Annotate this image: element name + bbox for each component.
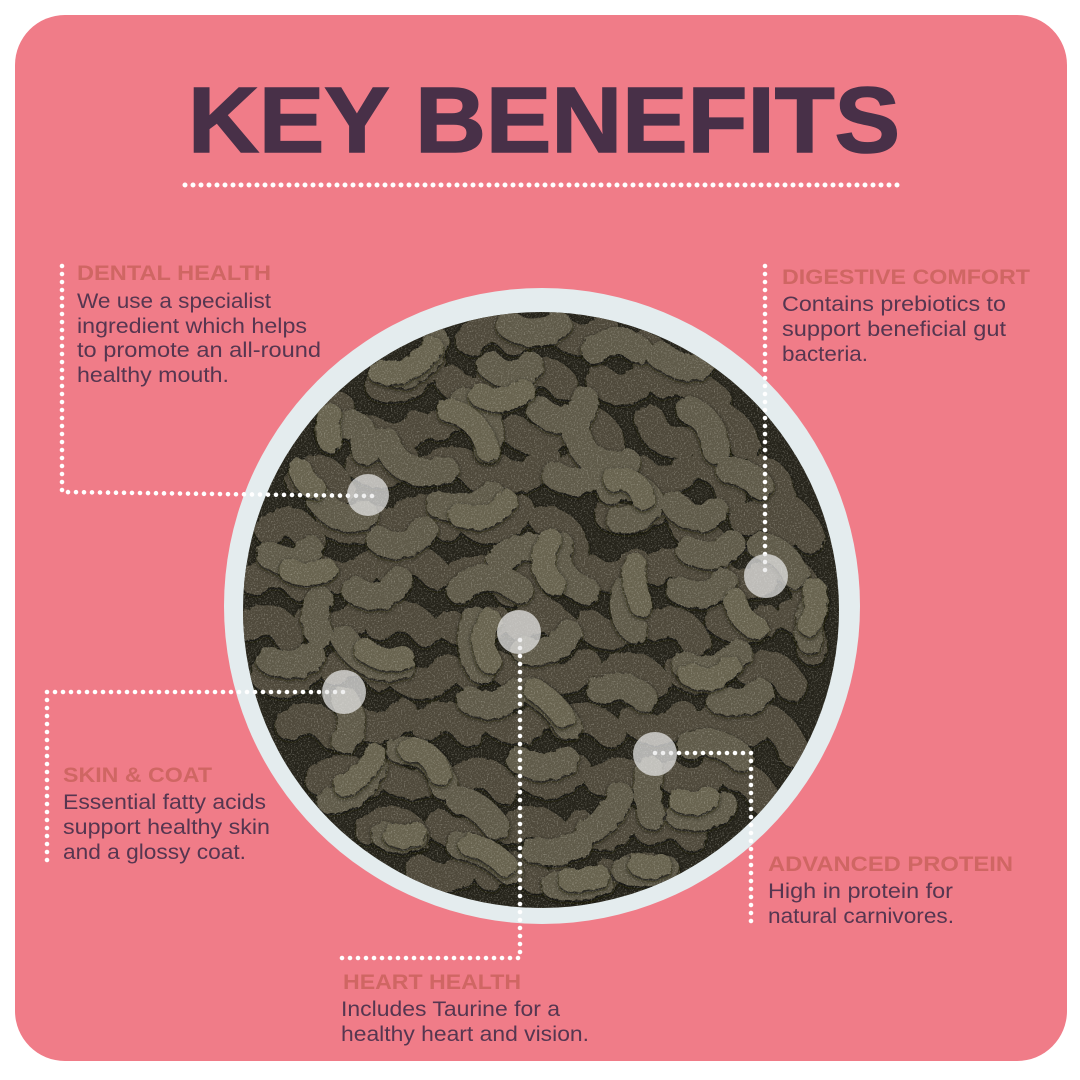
- description: and a glossy coat.: [63, 841, 246, 864]
- heading: DENTAL HEALTH: [77, 262, 271, 285]
- heading: HEART HEALTH: [343, 971, 521, 994]
- description: [63, 791, 270, 864]
- description: ingredient which helps: [77, 315, 307, 338]
- kibble pile: [240, 305, 850, 915]
- title: KEY BENEFITS: [188, 68, 900, 172]
- description: Contains prebiotics to: [782, 293, 1006, 316]
- heading: ADVANCED PROTEIN: [768, 853, 1013, 876]
- leader line: [763, 266, 767, 575]
- callout: dental health: [62, 262, 389, 516]
- leader line: [47, 692, 344, 860]
- title dotted underline: [185, 182, 900, 188]
- description: [77, 290, 321, 387]
- callout: advanced protein: [633, 732, 1013, 928]
- description: [768, 880, 954, 928]
- bowl rim: [224, 288, 860, 924]
- description: [341, 998, 589, 1046]
- description: [782, 293, 1006, 366]
- description: High in protein for: [768, 880, 953, 903]
- marker dot: [497, 610, 541, 654]
- heading: SKIN & COAT: [63, 764, 212, 787]
- description: support beneficial gut: [782, 318, 1006, 341]
- callout: skin and coat: [47, 670, 366, 864]
- description: Essential fatty acids: [63, 791, 266, 814]
- marker dot: [633, 732, 677, 776]
- leader line: [655, 753, 751, 922]
- leader line: [342, 632, 520, 958]
- callout: digestive comfort: [744, 266, 1030, 598]
- description: We use a specialist: [77, 290, 271, 313]
- food bowl with kibble: [224, 288, 860, 924]
- marker dot: [744, 554, 788, 598]
- description: to promote an all-round: [77, 339, 321, 362]
- description: bacteria.: [782, 343, 868, 366]
- marker dot: [322, 670, 366, 714]
- description: healthy heart and vision.: [341, 1023, 589, 1046]
- callout: heart health: [341, 610, 589, 1046]
- heading: DIGESTIVE COMFORT: [782, 266, 1030, 289]
- leader line: [62, 266, 372, 496]
- marker dot: [347, 474, 389, 516]
- description: support healthy skin: [63, 816, 270, 839]
- description: natural carnivores.: [768, 905, 954, 928]
- description: Includes Taurine for a: [341, 998, 560, 1021]
- bowl interior: [243, 312, 839, 908]
- description: healthy mouth.: [77, 364, 229, 387]
